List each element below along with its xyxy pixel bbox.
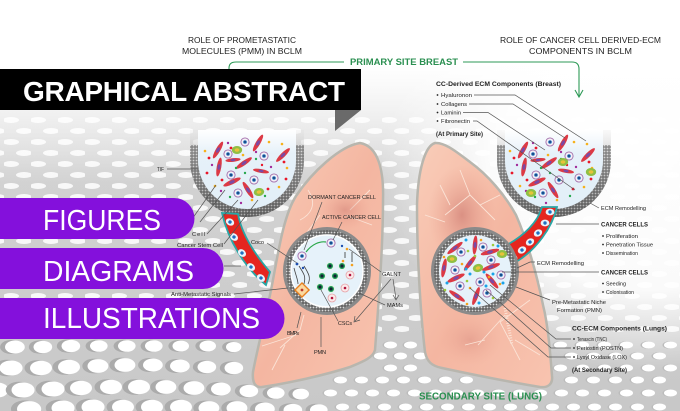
title: role of cancer cell derived ECM: ROLE OF CANCER CELL DERIVED-ECM bbox=[500, 36, 661, 45]
left diagram labels: Anti-Metastatic Signals bbox=[171, 292, 231, 298]
right bottom component list: Tenascin (TNC) bbox=[577, 337, 607, 343]
heading: primary site breast: PRIMARY SITE BREAST bbox=[350, 57, 459, 67]
title line 2: prometastatic molecules: MOLECULES (PMM) IN BCLM bbox=[182, 47, 302, 56]
right bottom component list bbox=[470, 285, 667, 374]
left diagram labels: GALNT bbox=[382, 272, 402, 278]
right top component list bbox=[436, 81, 586, 190]
left lung bbox=[253, 143, 383, 387]
right blood vessel bbox=[505, 207, 557, 262]
pill: illustrations bbox=[0, 298, 284, 339]
left diagram labels: ACTIVE CANCER CELL bbox=[322, 215, 381, 221]
right top component list: (At Primary Site) bbox=[436, 131, 483, 138]
right top component list: Fibronectin bbox=[441, 119, 470, 125]
bronchial tree left bbox=[262, 190, 372, 370]
right side labels bbox=[502, 203, 653, 314]
right side labels: Dissemination bbox=[606, 251, 638, 257]
heading: secondary site lung: SECONDARY SITE (LUNG) bbox=[419, 392, 542, 402]
left breast bowl bbox=[190, 130, 304, 217]
arrow: primary site connector bbox=[229, 62, 583, 97]
banner: graphical abstract: GRAPHICAL ABSTRACT bbox=[23, 76, 345, 107]
right side labels: Seeding bbox=[606, 282, 626, 288]
left diagram labels: MAMs bbox=[387, 303, 403, 309]
right side labels: Proliferation bbox=[606, 234, 638, 240]
title line 2: ECM components: COMPONENTS IN BCLM bbox=[529, 47, 632, 56]
title: role of prometastatic molecules: ROLE OF PROMETASTATIC bbox=[188, 36, 296, 45]
right bottom component list: (At Secondary Site) bbox=[572, 367, 627, 374]
left diagram labels: Coco bbox=[251, 240, 264, 246]
pill: figures bbox=[0, 198, 194, 239]
left diagram labels: CSCs bbox=[338, 321, 352, 327]
right lung tissue circle bbox=[431, 227, 519, 315]
banner fold bbox=[335, 110, 361, 131]
right top component list: Hyaluronon bbox=[441, 93, 472, 99]
right side labels: Formation (PMN) bbox=[557, 308, 602, 314]
pill: diagrams: DIAGRAMS bbox=[43, 256, 194, 288]
right top component list: Laminin bbox=[441, 110, 461, 116]
right bottom component list: Lysyl Oxidase (LOX) bbox=[577, 355, 627, 361]
right side labels: ECM Remodelling bbox=[601, 206, 646, 212]
pill: diagrams bbox=[0, 248, 224, 289]
left diagram labels: BMPs bbox=[287, 331, 299, 337]
right bottom component list: Periostin (POSTN) bbox=[577, 346, 623, 352]
right top component list: Collagens bbox=[441, 102, 467, 108]
right side labels: Pre-Metastatic Niche bbox=[552, 300, 606, 306]
right side labels: Colonisation bbox=[606, 290, 634, 296]
left diagram labels: TIF bbox=[157, 167, 164, 173]
pill: illustrations: ILLUSTRATIONS bbox=[43, 303, 260, 335]
right side labels: ECM Remodelling bbox=[537, 261, 584, 267]
left lung tissue circle bbox=[283, 227, 371, 315]
bronchial tree right bbox=[425, 170, 540, 360]
right lung bbox=[417, 143, 552, 387]
left diagram labels: Cell bbox=[192, 232, 205, 238]
pill: figures: FIGURES bbox=[43, 205, 161, 237]
left diagram labels bbox=[157, 167, 403, 356]
banner: graphical abstract bbox=[0, 69, 361, 110]
right side labels: CANCER CELLS bbox=[601, 222, 648, 228]
right side labels: CANCER CELLS bbox=[601, 270, 648, 276]
right top component list: CC-Derived ECM Components (Breast) bbox=[436, 81, 561, 88]
right side labels: Penetration Tissue bbox=[606, 242, 653, 248]
left diagram labels: DORMANT CANCER CELL bbox=[308, 195, 376, 201]
right bottom component list: CC-ECM Components (Lungs) bbox=[572, 326, 667, 332]
left blood vessel bbox=[222, 213, 270, 285]
right breast bowl bbox=[497, 130, 611, 217]
left diagram labels: PMN bbox=[314, 350, 326, 356]
left diagram labels: Cancer Stem Cell bbox=[177, 243, 223, 249]
